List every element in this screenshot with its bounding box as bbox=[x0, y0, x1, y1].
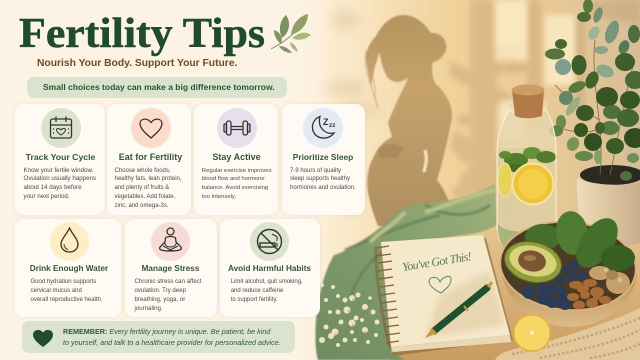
reminder text bbox=[63, 327, 281, 347]
potted plant bbox=[545, 0, 640, 185]
spinach bbox=[525, 209, 635, 275]
text: blood flow and hormone bbox=[202, 176, 265, 182]
text: Good hydration supports bbox=[30, 279, 96, 285]
icon: moon with zzz: zz bbox=[329, 122, 336, 129]
text bbox=[24, 166, 96, 200]
avocado bbox=[500, 236, 566, 288]
text: and reduce caffeine bbox=[231, 288, 283, 294]
icon: calendar with heart bbox=[40, 108, 80, 148]
lemon half bbox=[513, 314, 551, 352]
icon: moon with zzz: Z bbox=[323, 117, 329, 127]
text: breathing, yoga, or bbox=[134, 296, 185, 303]
card: drink enough water bbox=[15, 219, 121, 317]
card: stay active bbox=[194, 104, 278, 215]
heading: Eat for Fertility bbox=[119, 152, 182, 162]
drawn heart bbox=[429, 276, 451, 293]
icon: water drop bbox=[50, 222, 89, 261]
icon: meditation figure bbox=[151, 222, 190, 261]
text: Choose whole foods, bbox=[114, 168, 171, 174]
text: sleep supports healthy bbox=[290, 176, 350, 182]
icon: heart bbox=[130, 108, 170, 148]
silhouette of pregnant woman bbox=[365, 15, 452, 226]
reminder text: to yourself, and talk to a healthcare provider for personalized advice. bbox=[63, 338, 281, 347]
card: prioritize sleep bbox=[282, 104, 365, 215]
text: Ovulation usually happens bbox=[24, 175, 96, 182]
text bbox=[114, 168, 182, 209]
wall background bbox=[280, 0, 640, 360]
title: Fertility Tips bbox=[19, 11, 265, 57]
text bbox=[230, 278, 303, 303]
text: to support fertility. bbox=[231, 297, 278, 303]
heading: Drink Enough Water bbox=[30, 264, 108, 273]
knit blanket bbox=[495, 308, 640, 360]
text: overall reproductive health. bbox=[30, 297, 103, 303]
green cloth bbox=[315, 184, 497, 360]
water bottle with lemon and mint bbox=[497, 84, 556, 250]
text: hormones and ovulation. bbox=[290, 185, 356, 191]
card: manage stress bbox=[125, 219, 217, 317]
text: 7-9 hours of quality bbox=[290, 168, 341, 174]
heading: Prioritize Sleep bbox=[293, 152, 353, 162]
icon: no smoking bbox=[250, 222, 289, 261]
reminder text: REMEMBER: Every fertility journey is unique. Be patient, be kind bbox=[63, 327, 270, 336]
icon: dumbbell bbox=[216, 108, 256, 148]
notebook with handwritten note bbox=[376, 235, 513, 356]
text: Regular exercise improves bbox=[202, 168, 272, 174]
text bbox=[290, 168, 356, 191]
text bbox=[134, 278, 202, 312]
text: vegetables. Add folate, bbox=[114, 194, 175, 200]
handwritten text: You've Got This! bbox=[401, 249, 473, 274]
text: journaling. bbox=[134, 305, 163, 312]
heading: Manage Stress bbox=[142, 264, 199, 273]
table surface bbox=[390, 223, 640, 360]
pen bbox=[425, 282, 492, 338]
heading: Avoid Harmful Habits bbox=[228, 264, 311, 273]
text: Limit alcohol, quit smoking, bbox=[231, 279, 303, 285]
text bbox=[30, 278, 103, 303]
text bbox=[202, 168, 272, 200]
card: eat for fertility bbox=[106, 104, 190, 215]
baby's breath flowers bbox=[319, 283, 380, 355]
banner bbox=[27, 77, 287, 98]
salad bowl bbox=[496, 209, 640, 327]
text: your next period. bbox=[24, 193, 70, 200]
text: cervical mucus and bbox=[30, 288, 82, 294]
leaf sprig bbox=[271, 14, 311, 53]
icon: solid heart bbox=[33, 330, 53, 347]
text: balance. Avoid exercising bbox=[202, 185, 268, 191]
card: track your cycle bbox=[15, 104, 105, 215]
text: too intensely. bbox=[202, 194, 236, 200]
text: and plenty of fruits & bbox=[114, 185, 169, 191]
remember callout bbox=[22, 321, 295, 353]
banner: Small choices today can make a big difference tomorrow. bbox=[43, 82, 275, 92]
text: about 14 days before bbox=[24, 184, 82, 191]
heading: Stay Active bbox=[212, 152, 261, 162]
icon: moon with zzz bbox=[303, 108, 343, 148]
card: avoid harmful habits bbox=[220, 219, 320, 317]
blueberries bbox=[522, 261, 587, 310]
heading: Track Your Cycle bbox=[26, 152, 95, 162]
ceramic pot bbox=[577, 178, 640, 247]
text: Chronic stress can affect bbox=[134, 278, 201, 285]
text: healthy fats, lean protein, bbox=[114, 176, 182, 182]
text: zinc, and omega-3s. bbox=[114, 203, 169, 209]
tagline: Nourish Your Body. Support Your Future. bbox=[37, 58, 237, 69]
text: ovulation. Try deep bbox=[134, 287, 186, 294]
text: Know your fertile window. bbox=[24, 166, 93, 174]
nuts bbox=[567, 279, 611, 310]
